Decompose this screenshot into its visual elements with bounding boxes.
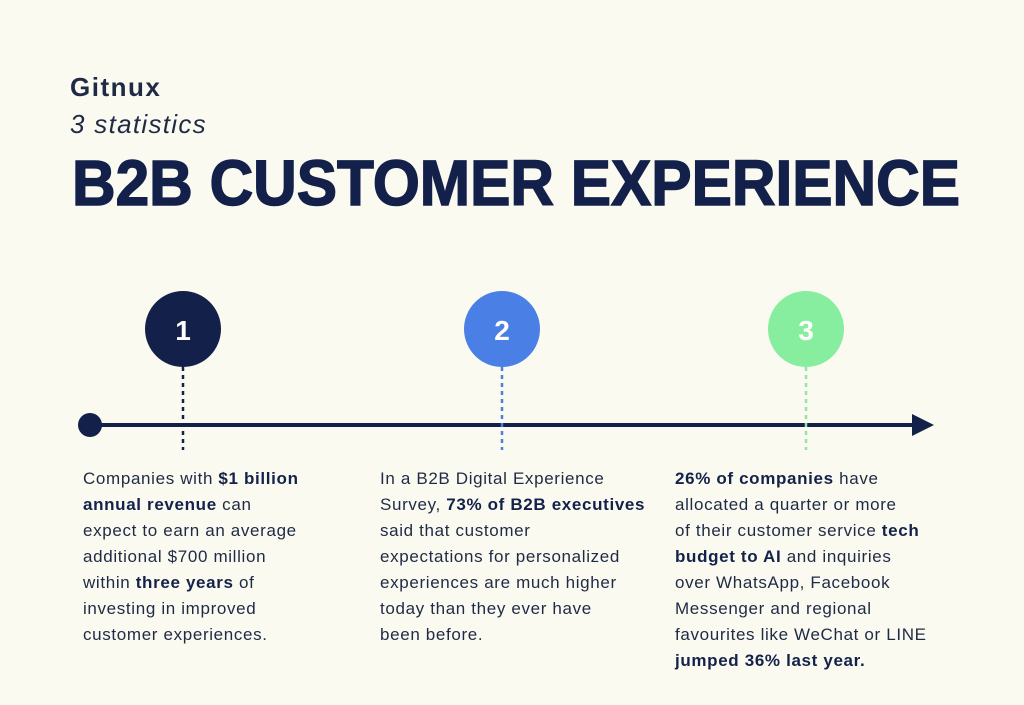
marker 1: 1 — [175, 315, 191, 346]
text block 3: Messenger and regional — [675, 599, 872, 618]
marker 2 — [464, 291, 540, 450]
text block 3: allocated a quarter or more — [675, 495, 897, 514]
text block 1: additional $700 million — [83, 547, 266, 566]
text block 1: investing in improved — [83, 599, 256, 618]
text block 2: Survey, 73% of B2B executives — [380, 495, 645, 514]
title: B2B CUSTOMER EXPERIENCE — [72, 147, 960, 219]
text block 1: within three years of — [83, 573, 254, 592]
text block 3: over WhatsApp, Facebook — [675, 573, 890, 592]
marker 3: 3 — [798, 315, 814, 346]
text block 2 — [380, 469, 645, 644]
text block 2: been before. — [380, 625, 483, 644]
text block 3: 26% of companies have — [675, 469, 879, 488]
text block 3: of their customer service tech — [675, 521, 919, 540]
text block 2: expectations for personalized — [380, 547, 620, 566]
text block 1: customer experiences. — [83, 625, 268, 644]
marker 2: 2 — [494, 315, 510, 346]
subtitle: 3 statistics — [70, 109, 207, 139]
text block 2: said that customer — [380, 521, 531, 540]
text block 2: today than they ever have — [380, 599, 592, 618]
text block 1: expect to earn an average — [83, 521, 297, 540]
text block 2: experiences are much higher — [380, 573, 617, 592]
text block 3: jumped 36% last year. — [675, 651, 865, 670]
text block 3 — [674, 469, 927, 670]
text block 3: favourites like WeChat or LINE — [675, 625, 927, 644]
logo: Gitnux — [70, 72, 161, 102]
text block 1 — [83, 469, 299, 644]
text block 2: In a B2B Digital Experience — [380, 469, 604, 488]
text block 3: budget to AI and inquiries — [675, 547, 892, 566]
text block 1: annual revenue can — [83, 495, 252, 514]
marker 1 — [145, 291, 221, 450]
text block 1: Companies with $1 billion — [83, 469, 299, 488]
marker 3 — [768, 291, 844, 450]
